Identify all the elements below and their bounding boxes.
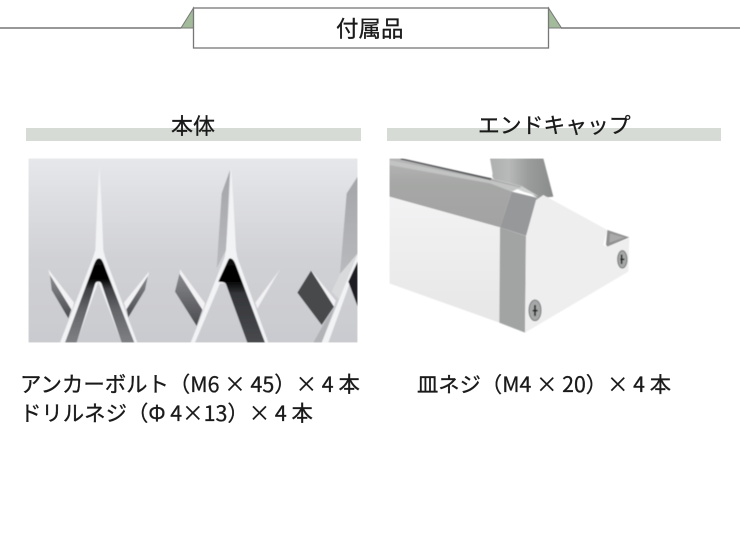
- heading: end cap: エンドキャップ: [478, 109, 631, 140]
- photo: main unit spikes: [28, 158, 358, 343]
- left banner line: [0, 27, 181, 29]
- top rail: [389, 158, 522, 227]
- heading bar: end cap: [387, 128, 721, 141]
- left green fold: [181, 8, 194, 28]
- right green fold: [548, 8, 562, 28]
- spike 3: [297, 177, 358, 343]
- photo: end cap: [389, 158, 629, 333]
- heading bar: main unit: [26, 128, 361, 141]
- text: anchor bolt: アンカーボルト（M6 × 45）× 4 本: [20, 368, 360, 399]
- title banner: [0, 8, 740, 48]
- end face: [525, 195, 629, 333]
- title: 付属品: [336, 12, 404, 44]
- right banner line: [561, 27, 740, 29]
- spike 1: [48, 167, 149, 343]
- notch: [606, 230, 629, 247]
- heading: main unit: 本体: [171, 109, 215, 141]
- spike 2: [175, 167, 280, 343]
- text: flat head screw: 皿ネジ（M4 × 20）× 4 本: [417, 368, 671, 399]
- grey corner: [500, 192, 539, 236]
- long white side: [389, 197, 500, 323]
- screws: [529, 300, 541, 321]
- title box: [194, 8, 548, 48]
- text: drill screw: ドリルネジ（Φ 4×13）× 4 本: [20, 397, 313, 428]
- back bracket: [490, 158, 553, 198]
